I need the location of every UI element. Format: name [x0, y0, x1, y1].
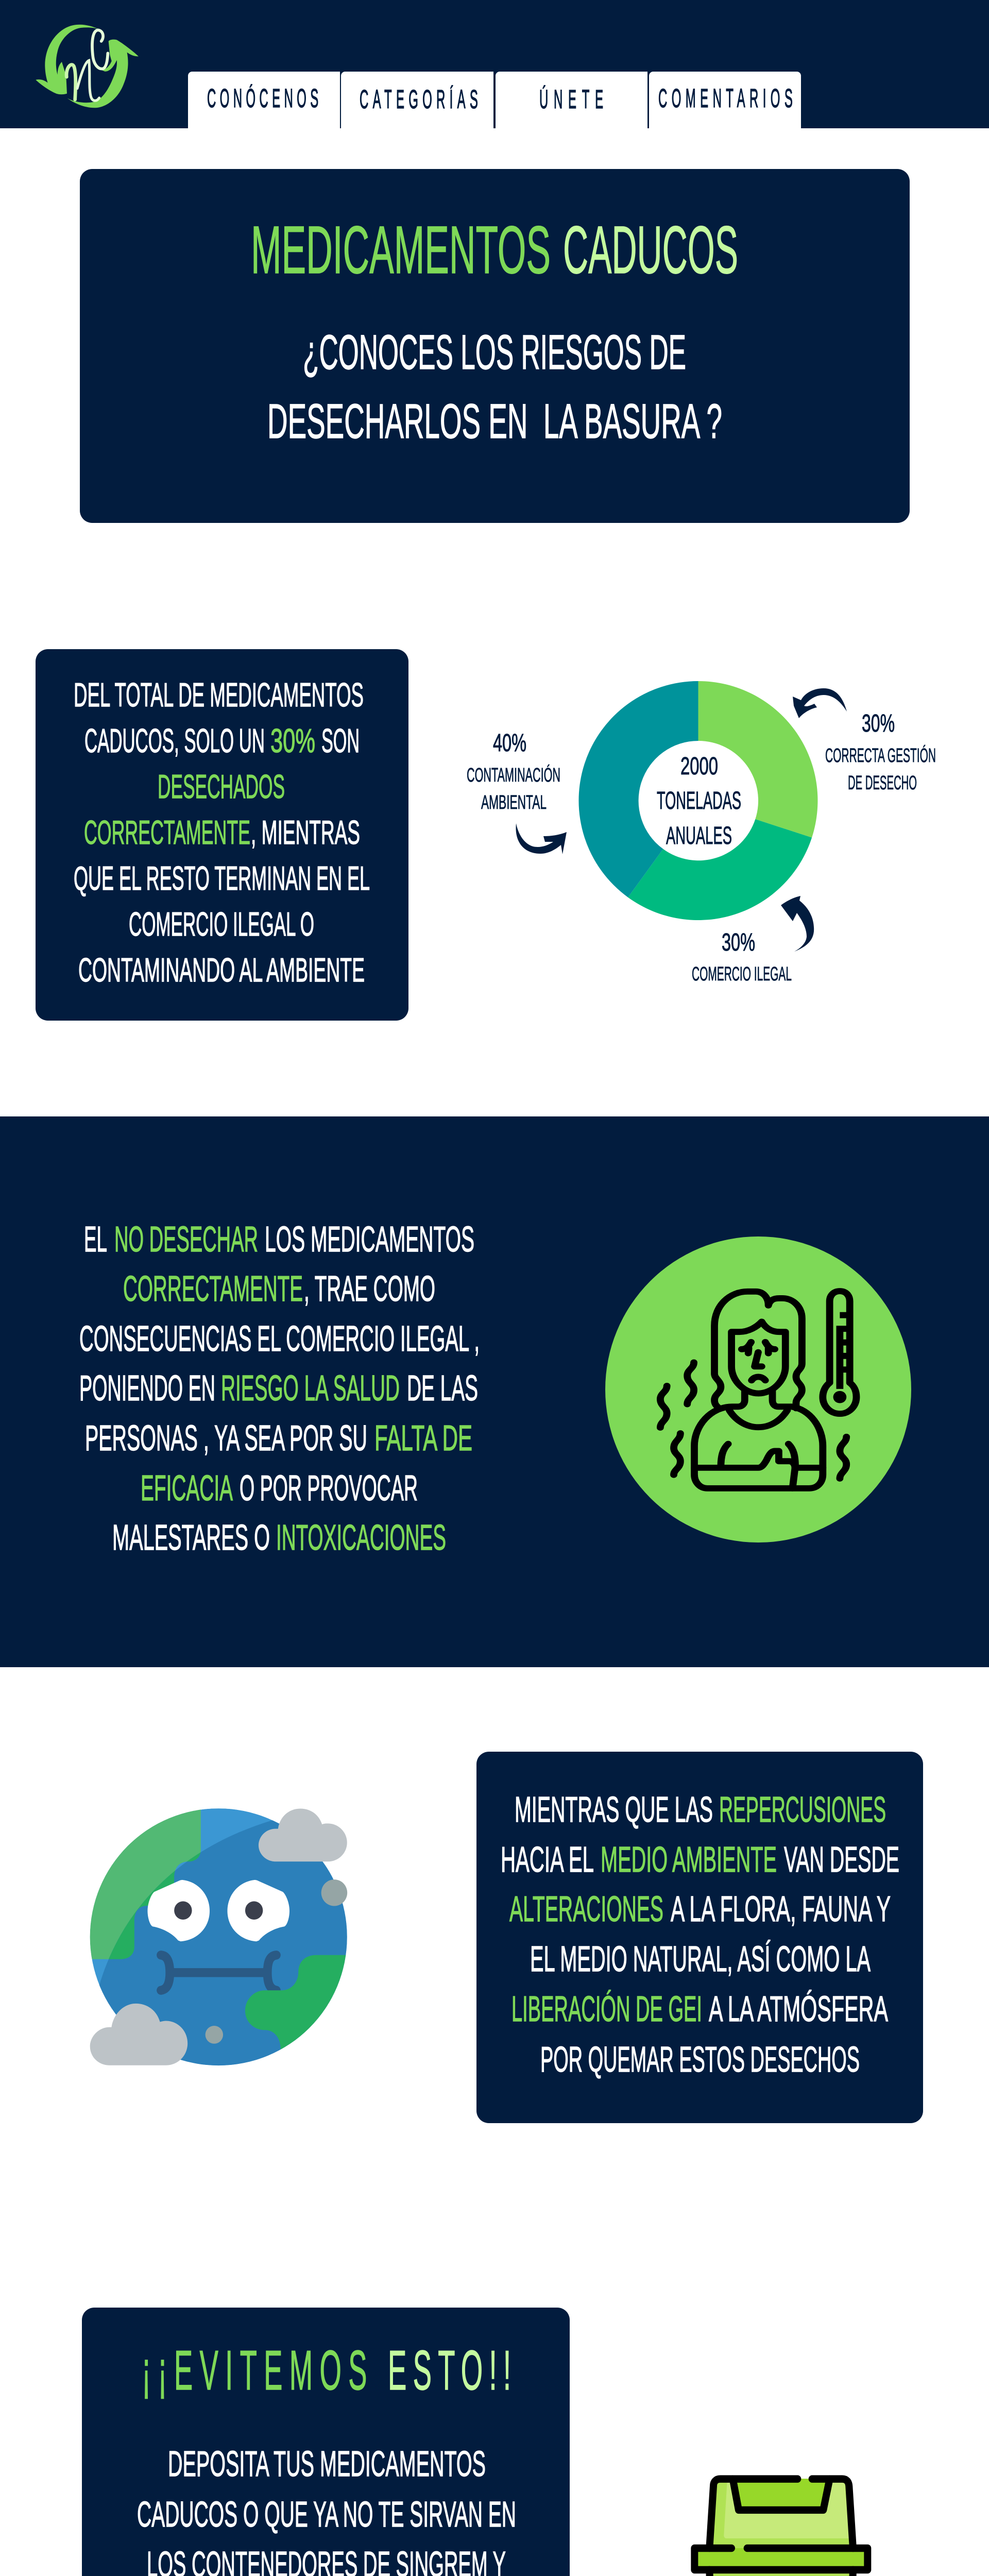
nav tab: categorías	[341, 72, 493, 128]
donut center label: 2000	[680, 753, 718, 780]
text block: consequences: MALESTARES O	[112, 1517, 270, 1557]
arrow: top right	[793, 688, 847, 718]
nav tab: comentarios	[649, 72, 801, 128]
panel: call to action	[82, 2308, 570, 2576]
nav tab: únete: ÚNETE	[539, 84, 603, 114]
text block: consequences: O POR PROVOCAR	[240, 1468, 418, 1508]
heading: medicamentos caducos: MEDICAMENTOS	[251, 212, 551, 287]
text block: consequences: INTOXICACIONES	[276, 1517, 446, 1557]
nav tab: categorías: CATEGORÍAS	[360, 84, 478, 114]
label: 40% contaminación ambiental: CONTAMINACIÓN	[467, 764, 560, 786]
arrow: left	[516, 823, 567, 854]
text block: consequences: LOS MEDICAMENTOS	[265, 1219, 474, 1259]
text block: consequences: DE LAS	[407, 1368, 478, 1408]
label: 30% correcta gestión de desecho	[825, 710, 936, 794]
donut center label: TONELADAS	[657, 787, 741, 815]
panel: environmental repercussions: MIENTRAS QUE LAS	[515, 1789, 713, 1829]
panel: statistics text: DESECHADOS	[158, 768, 285, 805]
segment: correcta gestión 30%	[698, 681, 817, 838]
text block: consequences: NO DESECHAR	[114, 1219, 258, 1259]
donut chart	[578, 681, 817, 920]
panel: statistics text: 30%	[270, 722, 315, 759]
panel: statistics text: QUE EL RESTO TERMINAN EN EL	[74, 859, 370, 897]
text block: consequences: FALTA DE	[374, 1418, 472, 1458]
panel: environmental repercussions: VAN DESDE	[784, 1839, 899, 1879]
panel: statistics text: COMERCIO ILEGAL O	[129, 905, 314, 943]
panel: environmental repercussions	[476, 1752, 923, 2123]
text block: consequences: EFICACIA	[141, 1468, 233, 1508]
label: 40% contaminación ambiental: AMBIENTAL	[481, 792, 547, 814]
text block: consequences: CORRECTAMENTE	[123, 1268, 303, 1309]
icon: green recycling bin	[694, 2479, 867, 2576]
panel: health consequences band	[0, 1116, 989, 1667]
panel: statistics text: , MIENTRAS	[251, 814, 360, 851]
arrow: bottom	[781, 896, 814, 952]
label: 40% contaminación ambiental: 40%	[493, 730, 526, 757]
panel: statistics text: CADUCOS, SOLO UN	[84, 722, 265, 759]
text block: deposit instructions: DEPOSITA TUS MEDICAMENTOS	[168, 2444, 486, 2484]
nav tab: comentarios: COMENTARIOS	[658, 84, 793, 113]
nav tab: conócenos	[188, 72, 340, 128]
text block: consequences: PERSONAS , YA SEA POR SU	[85, 1418, 367, 1458]
nav tab: conócenos: CONÓCENOS	[207, 83, 318, 113]
text block: consequences: PONIENDO EN	[79, 1368, 215, 1408]
panel: hero title	[80, 169, 910, 523]
panel: statistics text: SON	[321, 722, 360, 759]
label: 30% comercio ilegal	[692, 929, 792, 985]
label: 30% correcta gestión de desecho: 30%	[862, 710, 895, 737]
panel: environmental repercussions: MEDIO AMBIENTE	[601, 1839, 777, 1879]
panel: statistics text: CONTAMINANDO AL AMBIENTE	[78, 951, 365, 989]
panel: environmental repercussions: ALTERACIONES	[509, 1889, 663, 1929]
icon: sad earth globe	[90, 1808, 347, 2066]
text block: consequences: , TRAE COMO	[304, 1268, 435, 1309]
heading: evitemos esto: ESTO!!	[388, 2340, 511, 2402]
subtitle question	[267, 325, 722, 449]
header bar	[0, 0, 989, 128]
panel: environmental repercussions: LIBERACIÓN DE GEI	[511, 1989, 702, 2029]
panel: statistics text: CORRECTAMENTE	[84, 814, 250, 851]
panel: statistics text	[36, 649, 408, 1021]
segment: contaminación ambiental 40%	[578, 681, 698, 897]
text block: consequences: EL	[84, 1219, 107, 1259]
segment: comercio ilegal 30%	[628, 819, 812, 920]
text block: deposit instructions	[137, 2444, 516, 2576]
subtitle question: ¿CONOCES LOS RIESGOS DE	[303, 325, 686, 380]
text block: deposit instructions: CADUCOS O QUE YA NO TE SIRVAN EN	[137, 2494, 516, 2534]
label: 30% comercio ilegal: COMERCIO ILEGAL	[692, 963, 792, 985]
panel: statistics text: DEL TOTAL DE MEDICAMENTOS	[74, 676, 364, 714]
logo	[36, 25, 139, 108]
text block: consequences	[79, 1219, 480, 1557]
label: 30% comercio ilegal: 30%	[722, 929, 755, 956]
icon: sick woman with thermometer	[605, 1236, 911, 1543]
heading: evitemos esto	[142, 2340, 511, 2402]
text block: consequences: CONSECUENCIAS EL COMERCIO ILEGAL ,	[79, 1318, 480, 1359]
text block: consequences: RIESGO LA SALUD	[221, 1368, 400, 1408]
label: 30% correcta gestión de desecho: DE DESECHO	[848, 772, 917, 794]
heading: evitemos esto: ¡¡EVITEMOS	[142, 2340, 367, 2402]
label: 40% contaminación ambiental	[467, 730, 560, 814]
nav tab: únete	[496, 72, 647, 128]
donut center label	[657, 753, 741, 850]
heading: medicamentos caducos: CADUCOS	[563, 212, 738, 287]
panel: environmental repercussions: HACIA EL	[501, 1839, 594, 1879]
donut center label: ANUALES	[666, 822, 732, 850]
